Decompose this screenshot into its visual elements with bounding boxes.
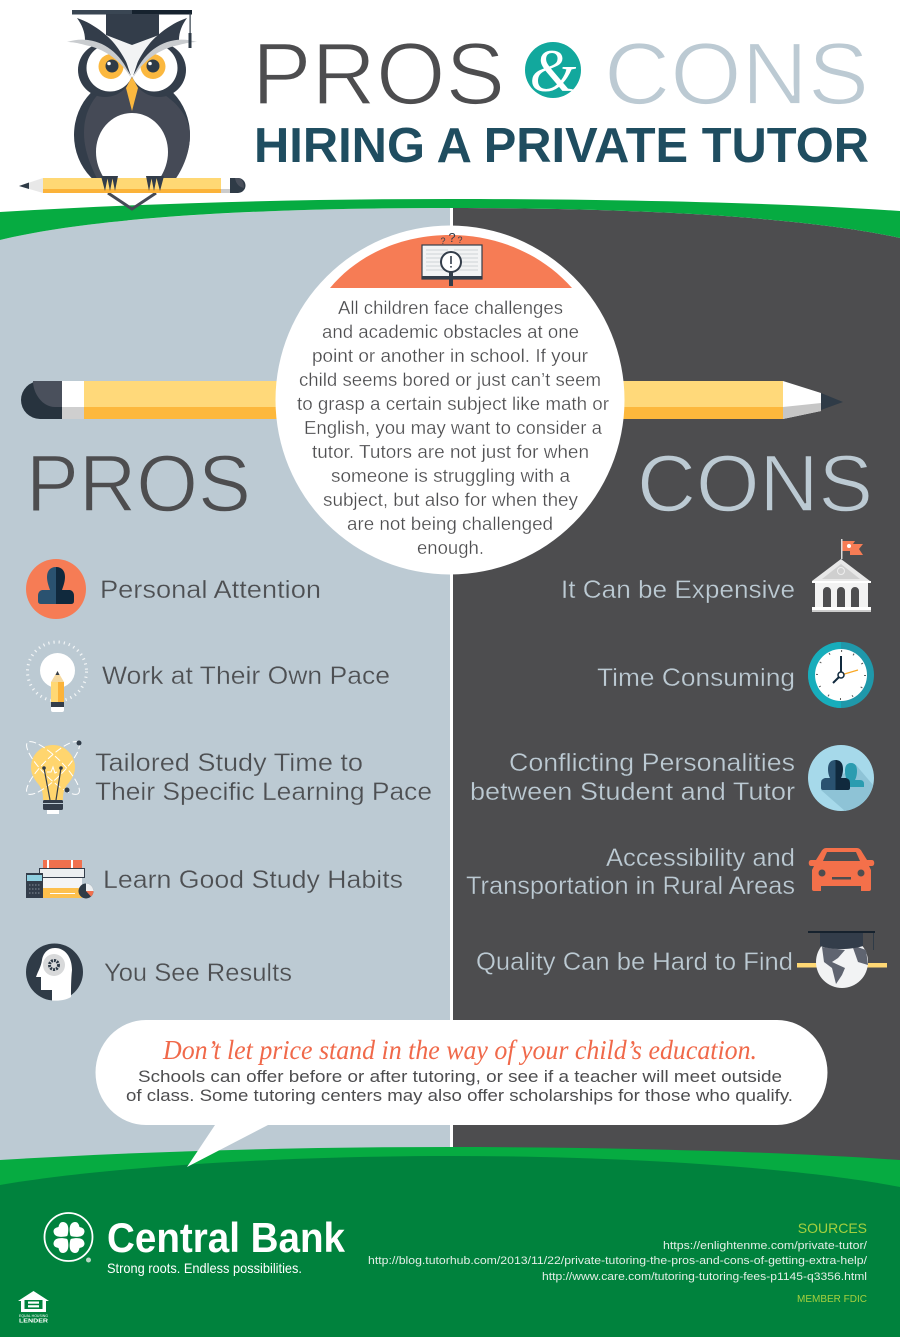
- con 5: quality: [476, 931, 887, 988]
- icon: bank building: [812, 539, 871, 612]
- equal housing lender: [18, 1291, 49, 1324]
- icon: pencil with light: [28, 642, 86, 712]
- icon: clover: [44, 1213, 92, 1262]
- icon: books and calculator: [26, 860, 94, 898]
- pro 3: tailored study time: Tailored Study Time to: [95, 749, 363, 777]
- equal housing lender: LENDER: [19, 1318, 49, 1324]
- green top arc: [0, 199, 900, 240]
- subtitle: HIRING A PRIVATE TUTOR: [254, 119, 869, 173]
- title: [252, 24, 869, 173]
- con 1: expensive: [561, 539, 871, 612]
- sources: http://www.care.com/tutoring-tutoring-fees-p1145-q3356.html: [542, 1271, 867, 1283]
- icon: two people: [808, 745, 874, 811]
- intro text: someone is struggling with a: [331, 466, 571, 486]
- intro text: [297, 298, 609, 558]
- icon: head with gear: [26, 944, 83, 1001]
- pro 1: personal attention: Personal Attention: [100, 576, 321, 604]
- con 3: conflicting personalities: Conflicting Personalities: [509, 749, 795, 777]
- pro 4: good study habits: [26, 860, 403, 898]
- intro text: tutor. Tutors are not just for when: [312, 442, 589, 462]
- con 2: time consuming: Time Consuming: [597, 664, 795, 692]
- orange header segment: [330, 235, 572, 288]
- con 3: conflicting personalities: [470, 745, 874, 811]
- callout speech bubble: [96, 1020, 827, 1167]
- con 1: expensive: It Can be Expensive: [561, 576, 795, 604]
- sources: SOURCES: [798, 1220, 867, 1236]
- graduation cap: [72, 10, 192, 48]
- con 4: accessibility: Accessibility and: [606, 844, 795, 872]
- panel: pros background: [0, 208, 451, 1175]
- owl body: [74, 75, 190, 195]
- icon: globe with cap and pencil: [797, 931, 887, 988]
- intro text: are not being challenged: [347, 514, 553, 534]
- sources: http://blog.tutorhub.com/2013/11/22/private-tutoring-the-pros-and-cons-of-getting-extra-help/: [368, 1255, 868, 1267]
- sources: [368, 1220, 868, 1305]
- big pencil: [21, 381, 843, 419]
- icon: book and magnifier: ?: [457, 235, 463, 245]
- panel: cons background: [451, 208, 900, 1175]
- footer background: [0, 1156, 900, 1337]
- pro 4: good study habits: Learn Good Study Habits: [103, 866, 403, 894]
- icon: light bulb with orbits: [20, 735, 86, 814]
- pro 2: work at their own pace: [28, 642, 390, 712]
- con 4: accessibility: [466, 844, 874, 900]
- intro text: subject, but also for when they: [323, 490, 578, 510]
- intro text: child seems bored or just can’t seem: [299, 370, 601, 390]
- ampersand badge: &: [530, 38, 577, 104]
- intro text: point or another in school. If your: [312, 346, 588, 366]
- wordmark: Central Bank: [107, 1214, 346, 1261]
- title: pros: PROS: [252, 24, 505, 123]
- owl face and brows: [67, 18, 197, 111]
- con 4: accessibility: Transportation in Rural Areas: [466, 872, 795, 900]
- equal housing lender: EQUAL HOUSING: [19, 1313, 48, 1318]
- sources: MEMBER FDIC: [797, 1294, 867, 1305]
- green bottom band: [0, 1147, 900, 1200]
- title: cons: CONS: [604, 24, 869, 123]
- con 5: quality: Quality Can be Hard to Find: [476, 948, 793, 976]
- pro 5: you see results: [26, 944, 292, 1001]
- icon: book and magnifier: ?: [440, 236, 446, 246]
- intro text: and academic obstacles at one: [322, 322, 579, 342]
- icon: book and magnifier: ?: [448, 230, 456, 245]
- con 2: time consuming: [597, 642, 874, 708]
- tagline: Strong roots. Endless possibilities.: [107, 1260, 302, 1276]
- callout body: of class. Some tutoring centers may also offer scholarships for those who qualify.: [126, 1086, 793, 1105]
- pro 3: tailored study time: Their Specific Learning Pace: [95, 778, 432, 806]
- owl mascot on pencil: [19, 10, 246, 209]
- callout headline: Don’t let price stand in the way of your child’s education.: [162, 1035, 757, 1065]
- central bank logo: [44, 1213, 346, 1276]
- con 3: conflicting personalities: between Student and Tutor: [470, 778, 795, 806]
- pro 5: you see results: You See Results: [104, 959, 292, 987]
- icon: clock: [808, 642, 874, 708]
- icon: person: [26, 559, 86, 619]
- intro text: to grasp a certain subject like math or: [297, 394, 609, 414]
- icon: car: [809, 848, 874, 891]
- owl eyes: [78, 43, 186, 97]
- perch pencil: [19, 178, 246, 193]
- intro circle: [276, 226, 624, 574]
- callout body: [126, 1067, 793, 1105]
- cons heading: CONS: [637, 439, 873, 529]
- callout body: Schools can offer before or after tutoring, or see if a teacher will meet outside: [138, 1067, 782, 1086]
- pencil tip end: [618, 381, 783, 407]
- icon: book and magnifier: [422, 230, 482, 286]
- pro 2: work at their own pace: Work at Their Own Pace: [102, 662, 390, 690]
- owl claws: [101, 176, 164, 191]
- intro text: enough.: [417, 538, 484, 558]
- pro 3: tailored study time: [20, 735, 432, 814]
- pencil eraser end: [21, 381, 62, 419]
- intro text: English, you may want to consider a: [304, 418, 603, 438]
- pros heading: PROS: [26, 439, 251, 529]
- pro 1: personal attention: [26, 559, 321, 619]
- intro text: All children face challenges: [338, 298, 563, 318]
- sources: https://enlightenme.com/private-tutor/: [663, 1240, 868, 1252]
